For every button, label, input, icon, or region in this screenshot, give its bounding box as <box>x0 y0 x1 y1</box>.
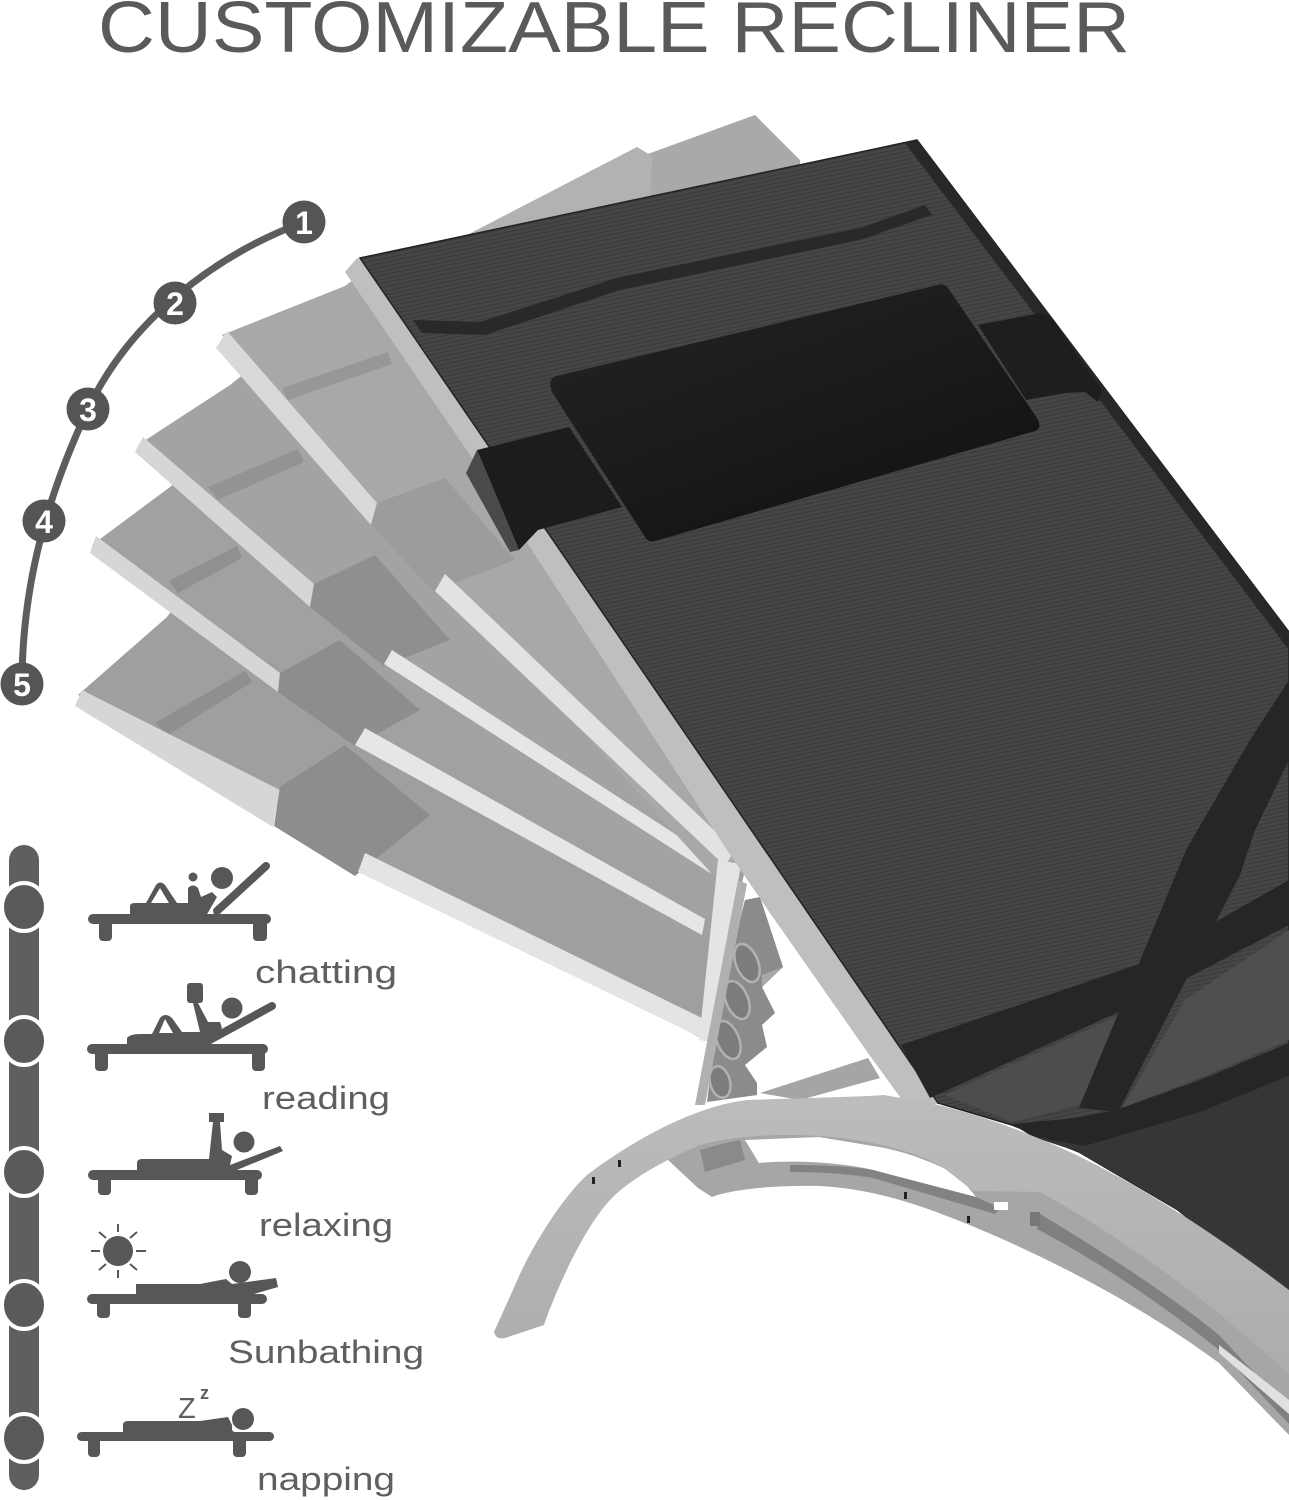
icon: chatting <box>88 866 271 941</box>
label: chatting: chatting <box>255 954 397 990</box>
icon: sun <box>91 1224 146 1278</box>
icon: relaxing <box>88 1113 283 1195</box>
diagonal support band <box>1079 680 1289 1112</box>
ghost backrest: position 4 <box>90 470 745 945</box>
timeline bar with nodes <box>2 845 46 1490</box>
main frame rail <box>345 258 940 1104</box>
rear strut <box>760 1058 880 1100</box>
fabric seam upper <box>413 205 932 335</box>
position 2: 2 <box>166 286 184 322</box>
darker seat area <box>1033 1076 1289 1300</box>
recline position scale 1 to 5 <box>0 200 326 706</box>
position 4: 4 <box>35 504 53 540</box>
position 2 <box>154 282 196 324</box>
ghost backrest: rear upper positions <box>465 115 800 245</box>
position 3 <box>66 388 110 430</box>
headrest pillow <box>550 284 1040 542</box>
support band across seat <box>901 880 1289 1098</box>
snoring letters: Z <box>178 1393 196 1425</box>
position 5: 5 <box>13 667 31 703</box>
position 3: 3 <box>79 392 97 428</box>
label: relaxing: relaxing <box>259 1207 393 1243</box>
position 1: 1 <box>295 205 313 241</box>
rivets <box>592 1160 970 1223</box>
position 4 <box>22 500 66 542</box>
headrest strap <box>466 313 1102 552</box>
ghost frame column <box>699 860 741 1042</box>
label: napping: napping <box>257 1461 395 1497</box>
armrest arch <box>494 1095 1289 1435</box>
position 1 <box>282 200 326 244</box>
icon: napping <box>77 1383 274 1457</box>
bracket <box>700 1140 1040 1226</box>
label: reading: reading <box>262 1080 390 1116</box>
highlight <box>1219 1345 1289 1414</box>
right edge hem <box>905 140 1289 650</box>
snoring letters <box>178 1383 209 1425</box>
opening in rail <box>745 1137 976 1197</box>
icon: reading <box>87 983 272 1071</box>
ghost backrest: position 2 <box>216 275 770 885</box>
ghost backrest: position 5 <box>75 600 745 1041</box>
icon: sunbathing <box>87 1224 278 1318</box>
ghost backrest: position 3 <box>135 365 750 918</box>
adjustment rack <box>695 880 783 1105</box>
lighter fabric patches <box>945 1010 1130 1122</box>
dark rail trim <box>790 1165 1000 1214</box>
main backrest fabric <box>360 140 1289 1300</box>
lower rail and end loop <box>667 1130 1289 1435</box>
label: sunbathing: Sunbathing <box>228 1334 424 1370</box>
snoring letters: z <box>200 1383 209 1403</box>
main arch body <box>494 1095 1289 1375</box>
lower curved band <box>1012 1043 1289 1146</box>
position 5 <box>0 662 44 706</box>
dark lower trim <box>1037 1214 1289 1424</box>
